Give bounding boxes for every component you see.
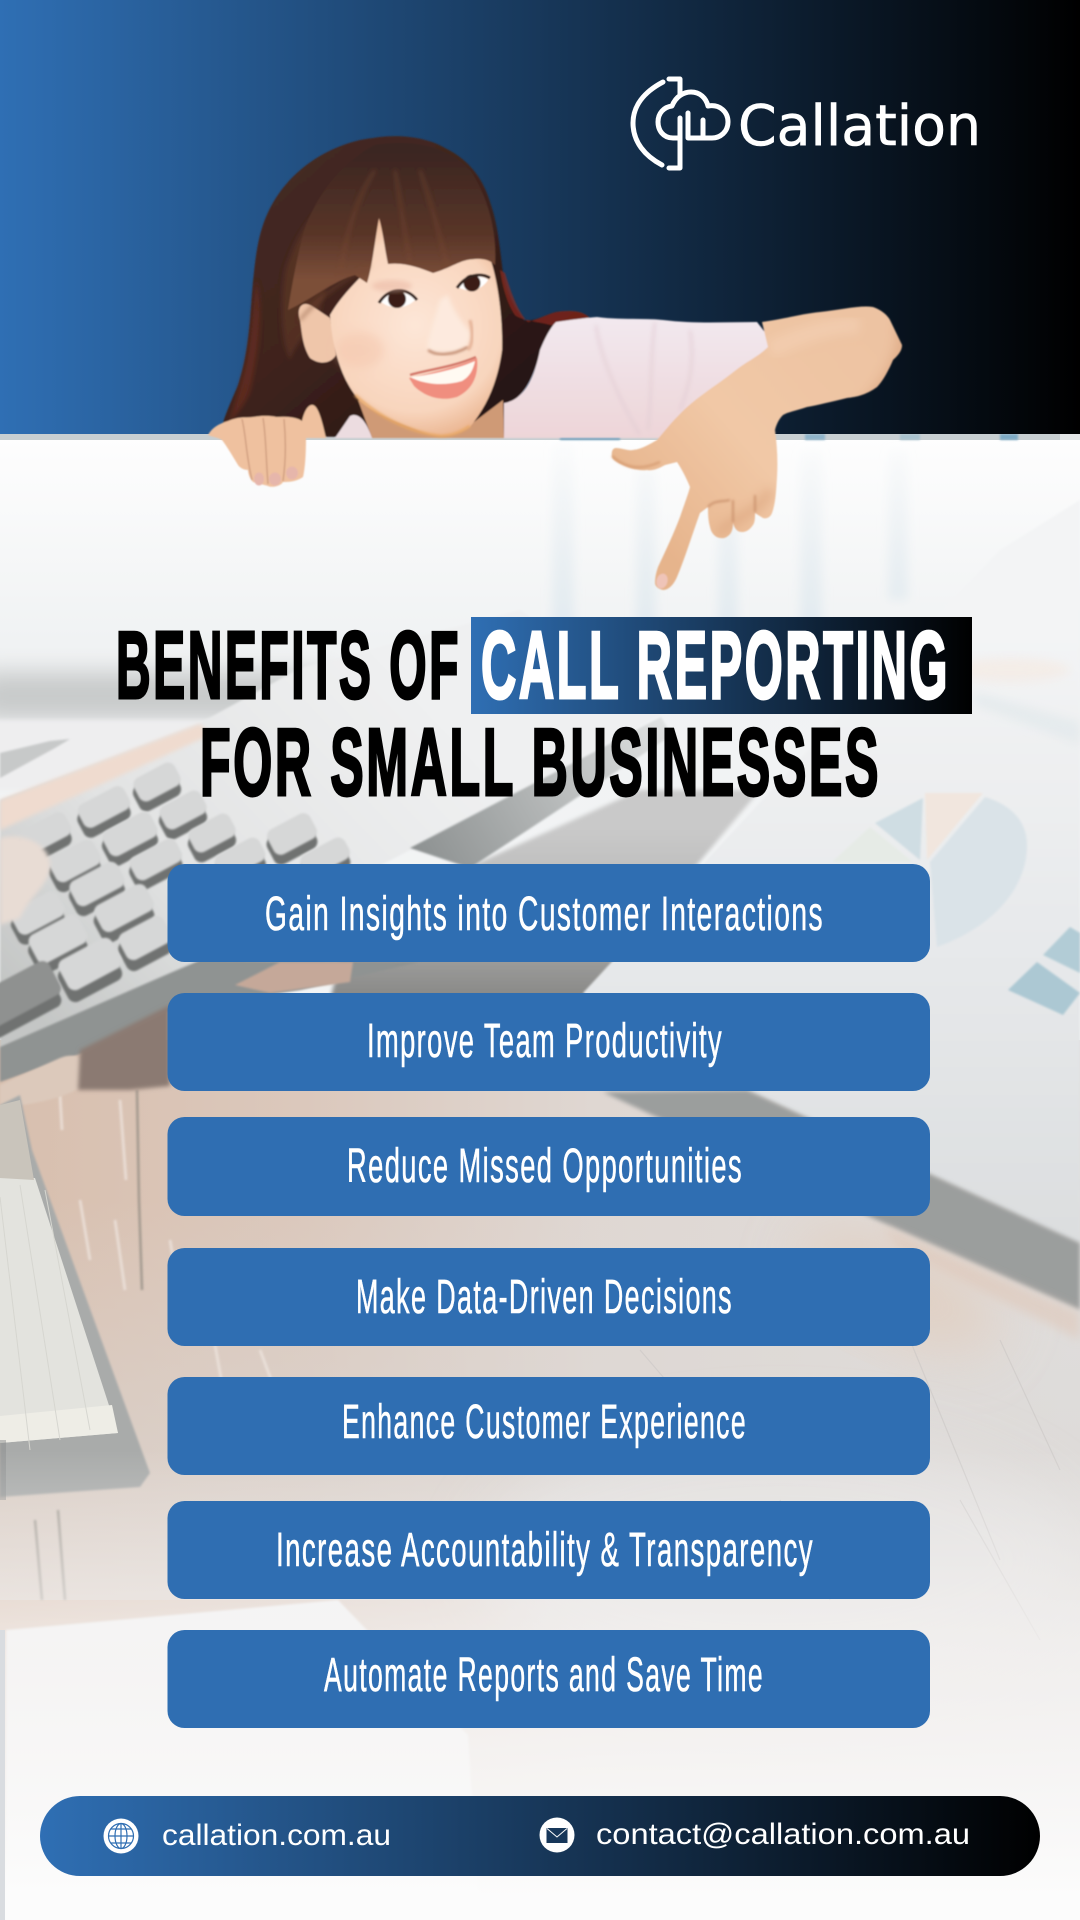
book edge under paper xyxy=(603,1090,1080,1310)
website text: callation.com.au xyxy=(162,1819,391,1852)
logo text: Callation xyxy=(738,94,981,159)
title xyxy=(116,612,972,816)
bottom-left paper sheet xyxy=(6,1600,480,1920)
benefit button 4 xyxy=(168,1248,930,1346)
report paper with pie chart xyxy=(583,500,1080,1340)
smile xyxy=(409,357,477,399)
left hand on panel edge xyxy=(208,405,326,487)
calculator photo xyxy=(0,610,672,1108)
benefit button 2: Improve Team Productivity xyxy=(367,1015,723,1068)
benefit button 3: Reduce Missed Opportunities xyxy=(347,1140,743,1193)
benefit button 1 xyxy=(168,864,930,962)
header gradient band xyxy=(0,0,1080,434)
icon: mail xyxy=(540,1818,574,1852)
fringe strands xyxy=(300,170,447,320)
benefit button 5 xyxy=(168,1377,930,1475)
footer contact bar xyxy=(40,1796,1040,1876)
icon: cloud with phone arc xyxy=(633,79,728,168)
grey band upper left xyxy=(0,672,330,720)
calculator keys xyxy=(0,760,353,1046)
hair xyxy=(220,136,590,438)
benefit button 5: Enhance Customer Experience xyxy=(342,1396,747,1449)
hands under calculator xyxy=(0,837,50,925)
email text: contact@callation.com.au xyxy=(596,1818,970,1851)
neck xyxy=(358,400,504,438)
logo: Callation xyxy=(633,79,981,168)
benefit button 3 xyxy=(168,1117,930,1216)
right arm and pointing hand xyxy=(610,306,903,591)
benefit button 2 xyxy=(168,993,930,1091)
faint vertical stripes xyxy=(552,445,908,635)
wooden desk xyxy=(0,1040,1080,1920)
grey area behind calculator xyxy=(330,790,760,1000)
woman peeking over panel xyxy=(208,136,920,600)
pen xyxy=(0,739,70,778)
background photo panel xyxy=(0,434,1080,1920)
icon: globe xyxy=(104,1818,138,1854)
calculator front edge xyxy=(0,960,420,1082)
nose xyxy=(427,295,470,352)
title line 1: BENEFITS OF xyxy=(116,612,461,719)
shirt xyxy=(335,317,775,438)
face and ear xyxy=(299,212,502,436)
benefit button 4: Make Data-Driven Decisions xyxy=(356,1271,733,1324)
benefit button 7 xyxy=(168,1630,930,1728)
eyes xyxy=(372,274,490,308)
strip under header xyxy=(0,434,1080,440)
benefit button 6 xyxy=(168,1501,930,1599)
title highlight box xyxy=(471,617,972,714)
notebook xyxy=(0,1095,150,1500)
fringe xyxy=(288,143,495,310)
